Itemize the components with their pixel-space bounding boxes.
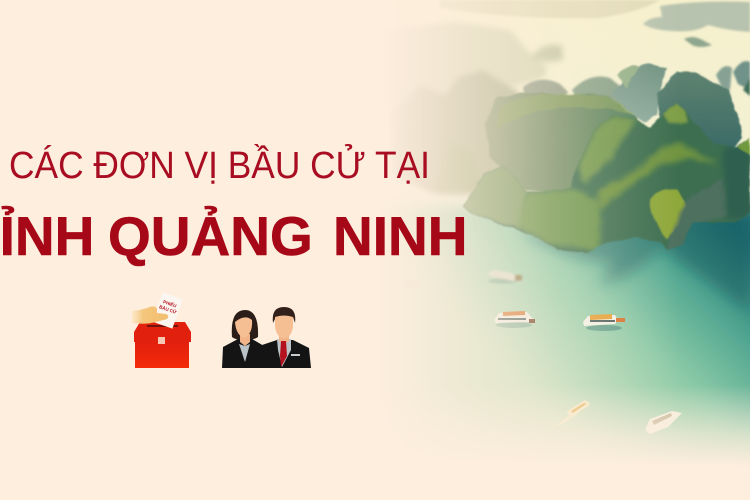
boat 5	[645, 411, 682, 434]
woman suit	[222, 339, 264, 368]
icon: ballot box with hand	[132, 292, 191, 368]
man tie	[280, 341, 287, 367]
left islet	[463, 166, 527, 228]
central mountain	[485, 92, 640, 192]
distant islands top right	[440, 0, 750, 47]
lower left slopes	[515, 188, 600, 250]
photo: Ha Long Bay aerial view	[401, 0, 750, 460]
hand	[132, 306, 168, 324]
mossy patch on front cliff	[650, 189, 686, 240]
ghost boat near text	[401, 281, 420, 289]
box lid	[134, 322, 191, 342]
boat 2	[494, 311, 535, 328]
bottom fade overlay	[375, 385, 750, 467]
slot	[147, 325, 178, 327]
left fade overlay	[375, 0, 680, 470]
heading: first line: CÁC ĐƠN VỊ BẦU CỬ TẠI	[9, 143, 430, 187]
right tip highlight	[738, 138, 750, 156]
bottom band	[375, 466, 750, 500]
boat 4	[552, 400, 590, 428]
heading: province name: QUẢNG	[108, 205, 328, 267]
man neck	[279, 332, 289, 344]
green sea	[411, 196, 750, 460]
woman hair	[232, 310, 258, 340]
icon: two delegates	[222, 307, 311, 368]
woman neck	[240, 334, 250, 346]
hazy islands left	[404, 24, 564, 196]
box body	[135, 342, 189, 368]
sky and distant water	[481, 0, 750, 144]
ballot paper: BẦU CỬ	[159, 303, 178, 315]
boat 1	[488, 270, 522, 284]
woman face	[235, 317, 252, 338]
rear ridge highlight	[577, 115, 637, 185]
man suit	[262, 340, 311, 368]
mid central islands	[523, 61, 750, 110]
front ridge highlight	[598, 143, 720, 210]
ballot paper: PHIẾU	[162, 298, 177, 308]
man hair	[273, 307, 295, 323]
water shadows under islands	[520, 215, 750, 312]
cliff face	[667, 178, 730, 250]
man shirt	[277, 339, 291, 367]
heading: province name: NINH	[333, 205, 467, 267]
back right mountains	[612, 63, 743, 150]
peak highlight	[663, 103, 688, 124]
box lock	[158, 337, 165, 344]
ballot paper	[153, 292, 182, 329]
foreground islands	[450, 100, 750, 260]
man face	[275, 316, 293, 338]
right shadow	[723, 144, 750, 220]
pocket square	[291, 354, 300, 356]
boat 3	[583, 314, 625, 331]
woman shirt	[239, 344, 250, 362]
